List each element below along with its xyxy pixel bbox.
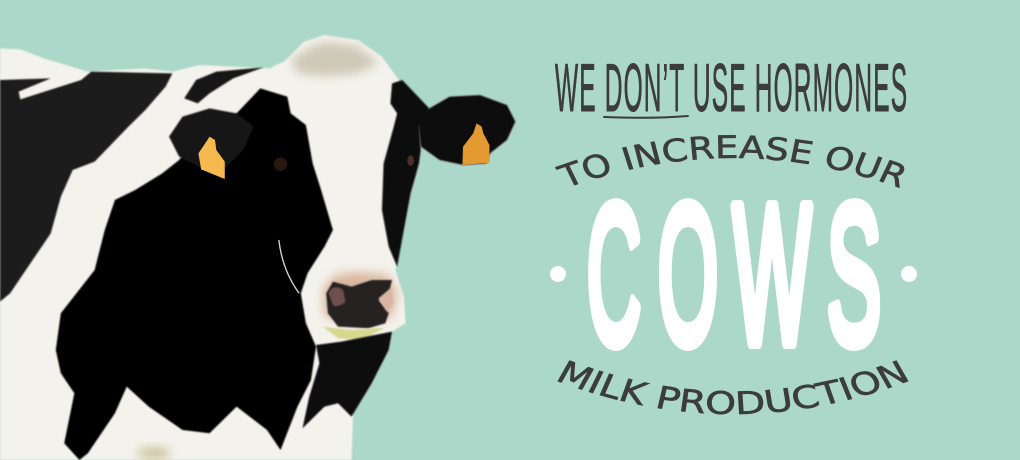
shoulder black patch xyxy=(184,67,264,103)
main word: cows: C xyxy=(587,165,641,384)
left nostril xyxy=(329,287,345,306)
main word: cows xyxy=(587,165,881,384)
left ear xyxy=(169,108,254,170)
neck and head black patch xyxy=(56,88,333,460)
mouth xyxy=(323,327,385,340)
curved text: to increase our: TO INCREASE OUR xyxy=(555,135,904,188)
left eye xyxy=(274,158,287,171)
infographic canvas: S xyxy=(827,165,881,384)
whisker line xyxy=(279,240,299,293)
right nostril xyxy=(379,288,394,312)
body black patch xyxy=(0,72,172,302)
right dot xyxy=(901,266,917,282)
lower jaw black xyxy=(303,332,392,428)
curved text: milk production: MILK PRODUCTION xyxy=(558,360,908,414)
underline under don't xyxy=(604,116,688,118)
right eye xyxy=(407,155,414,166)
headline line: we don't use hormones: WE DON’T USE HORMONES xyxy=(555,50,907,126)
main word: cows: W xyxy=(733,165,811,384)
forehead shading xyxy=(291,42,379,77)
main word: cows: O xyxy=(658,165,718,384)
right ear tag xyxy=(462,123,489,165)
left ear tag xyxy=(198,137,225,179)
muzzle skin xyxy=(323,272,397,323)
cow photo illustration xyxy=(0,35,515,460)
left dot xyxy=(550,266,566,282)
right face black patch xyxy=(382,80,429,267)
cow silhouette xyxy=(0,35,515,460)
right ear xyxy=(417,95,515,165)
nose xyxy=(326,280,392,328)
chest cream spot xyxy=(137,447,171,460)
